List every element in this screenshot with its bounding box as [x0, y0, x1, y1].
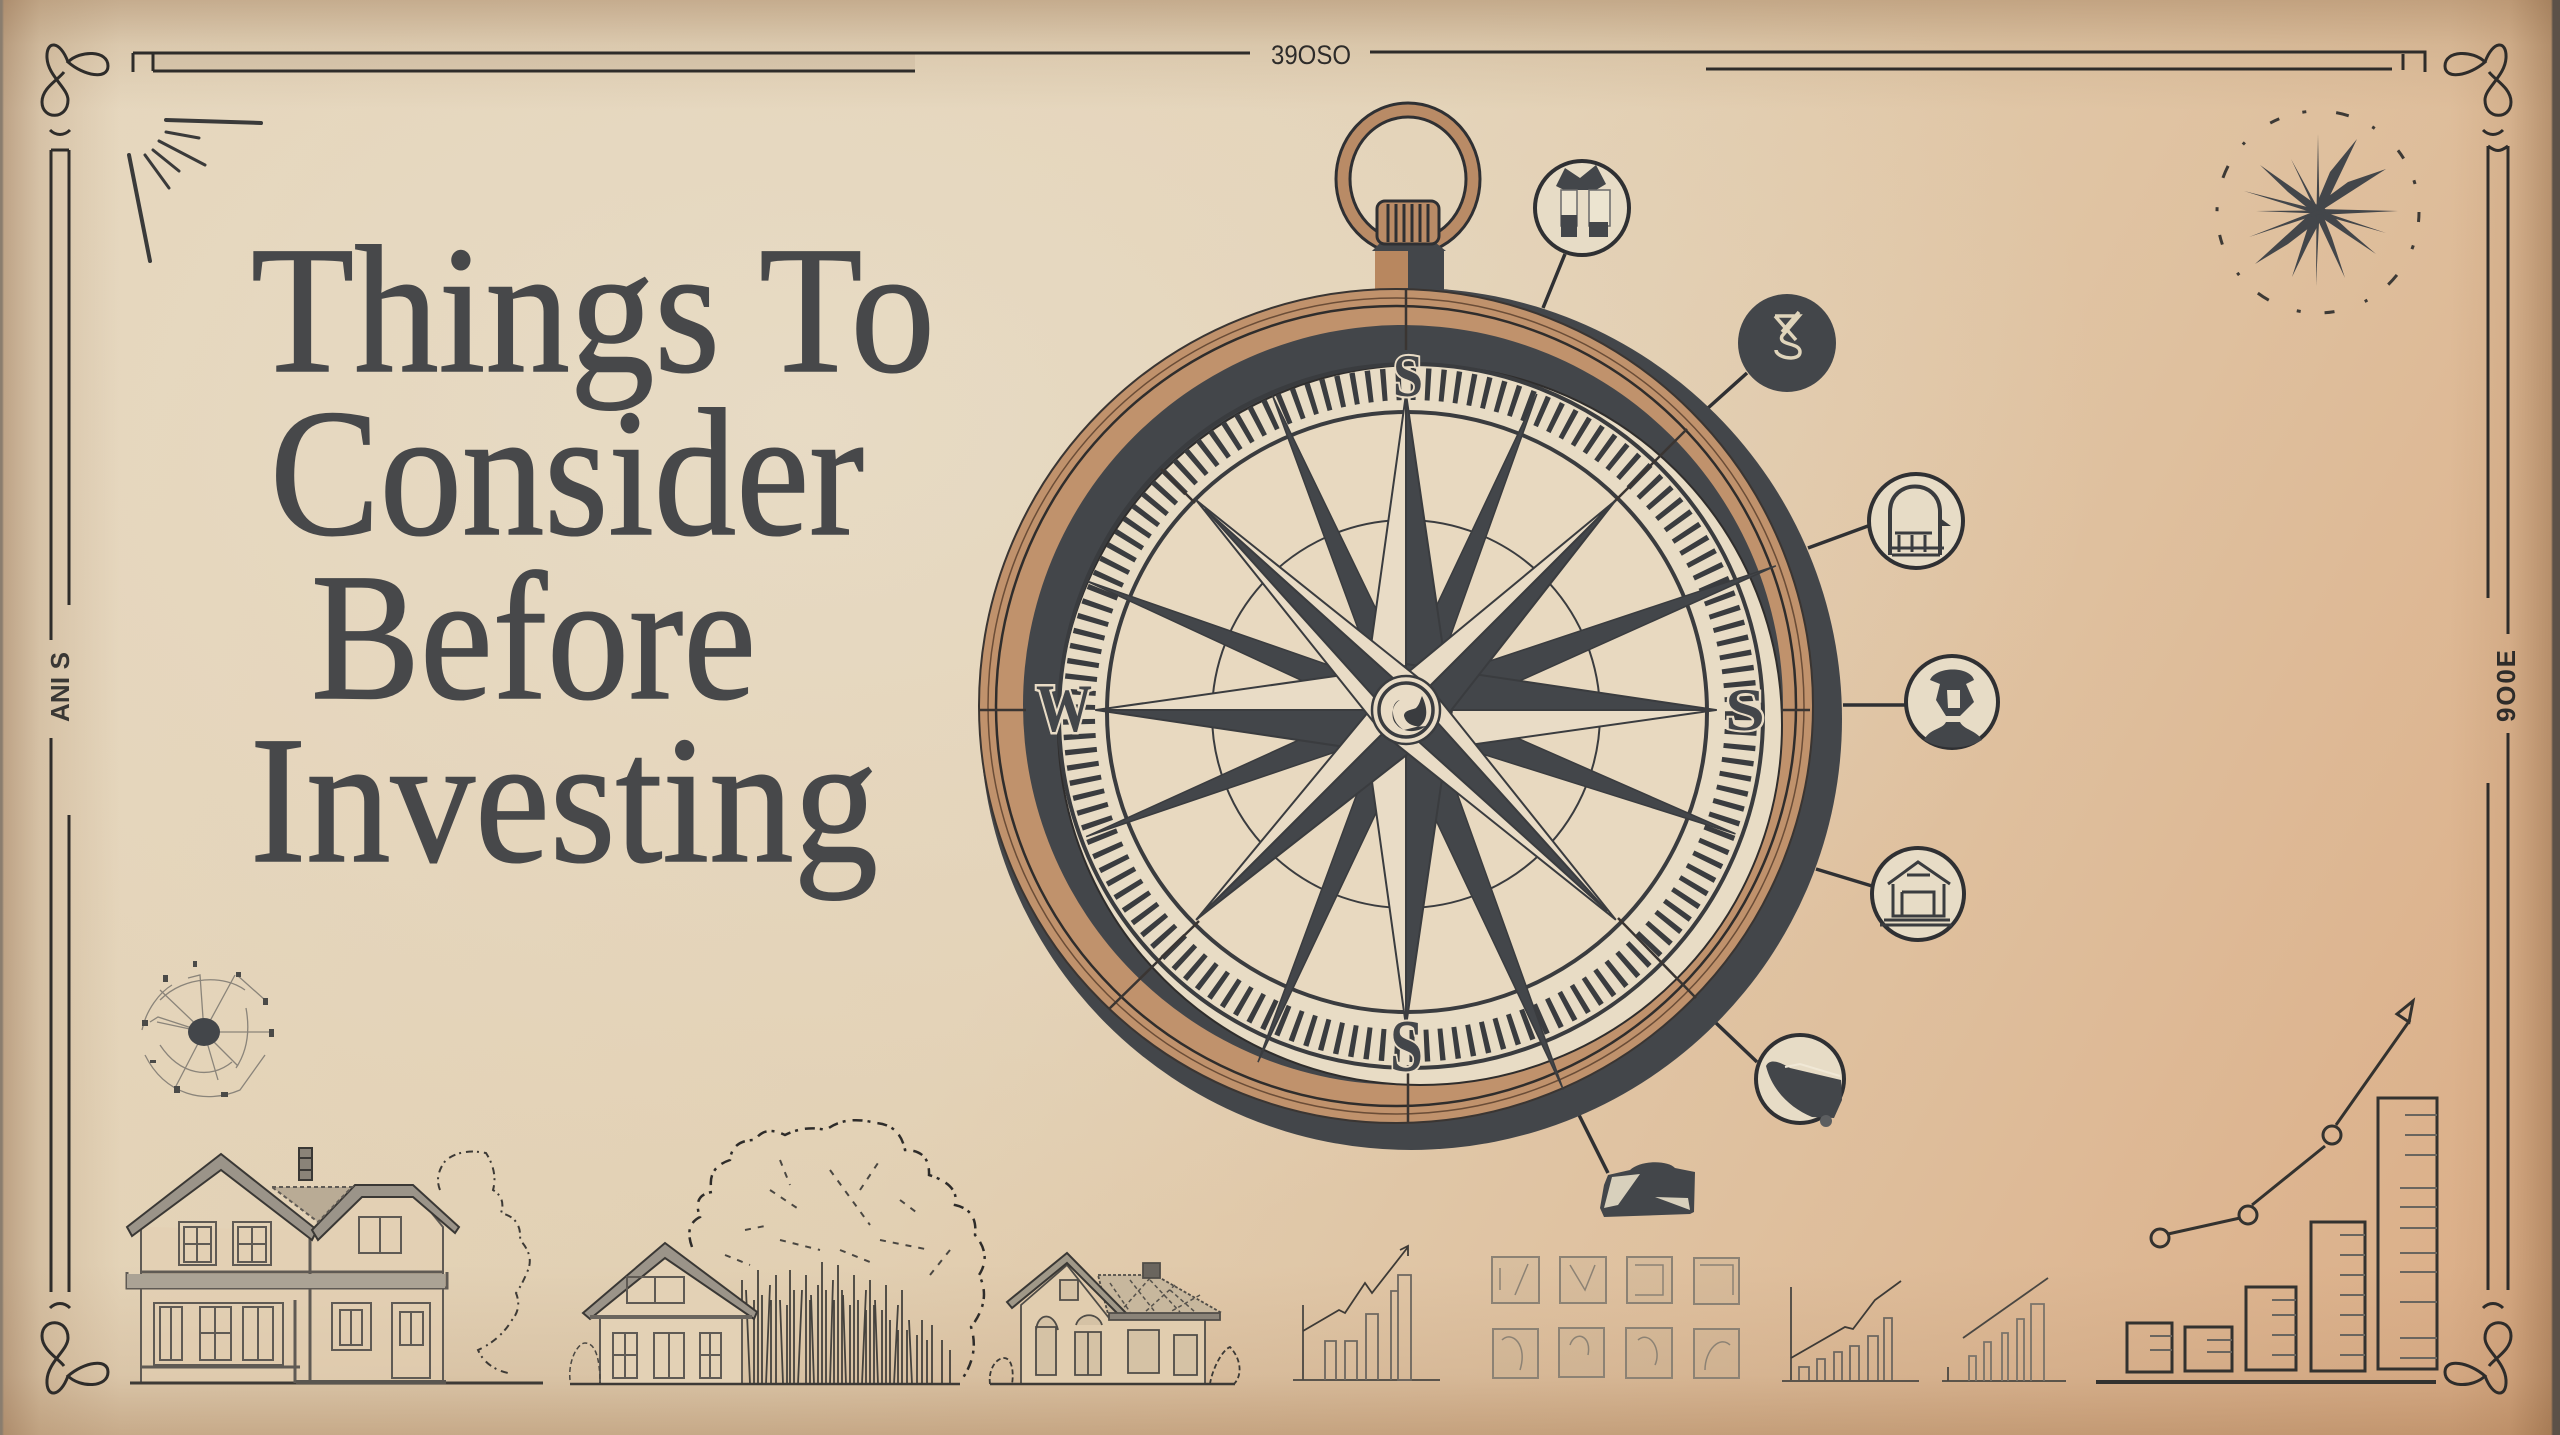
frame caption: right: 9O0E — [2491, 650, 2521, 722]
compass dial — [1058, 365, 1782, 1085]
corner knot: bottom left — [42, 1304, 108, 1393]
sun rays: top left — [129, 120, 261, 261]
small bar chart 1 — [1293, 1246, 1440, 1380]
callout connector lines — [1543, 254, 1905, 1173]
compass letters: S — [1393, 343, 1423, 409]
bar tick marks — [2150, 1115, 2437, 1358]
compass letters: W — [1036, 670, 1092, 746]
frame caption: left: ANI S — [45, 652, 75, 722]
title: Consider — [270, 373, 864, 574]
diagonal points — [1173, 477, 1641, 945]
degree ticks — [1079, 384, 1741, 1046]
compass case — [980, 288, 1842, 1150]
small bar chart 2 — [1782, 1281, 1919, 1381]
secondary points — [1080, 388, 1783, 1097]
corner knot: bottom right — [2445, 1304, 2511, 1393]
house 1 — [127, 1148, 543, 1384]
compass rose — [979, 290, 1810, 1123]
compass letters: S — [1390, 1006, 1423, 1088]
compass letters: S — [1725, 677, 1765, 743]
tree trunks — [742, 1262, 950, 1384]
cardinal points — [1096, 394, 1716, 1026]
callout icon 3: arch doorway — [1869, 474, 1963, 568]
large growth chart — [2096, 1001, 2437, 1382]
callout icon 4: portrait — [1906, 656, 1998, 748]
callout icon 1: houses — [1535, 161, 1629, 255]
tree behind house 1 — [438, 1152, 530, 1373]
radial lines across bezel — [979, 290, 1810, 1123]
house 2 with big tree — [570, 1120, 985, 1384]
compass — [979, 110, 1842, 1150]
callout icon 5: barn — [1872, 848, 1964, 940]
small bar chart 3 — [1942, 1278, 2066, 1381]
icon tile grid — [1492, 1257, 1739, 1378]
title — [250, 210, 935, 901]
compass hub — [1372, 676, 1440, 744]
corner knot: top right — [2445, 45, 2511, 135]
compass ring handle — [1343, 110, 1473, 292]
compass star: top right — [2217, 111, 2419, 313]
compass letters — [1036, 343, 1765, 1088]
corner knot: top left — [42, 45, 108, 135]
title: Things To — [251, 210, 935, 411]
title: Before — [311, 537, 756, 738]
frame caption: top: 39OSO — [1271, 40, 1351, 70]
callout icon 6: boat — [1756, 1035, 1844, 1127]
compass star: bottom left — [142, 961, 274, 1097]
callout icon 7: briefcase — [1600, 1162, 1695, 1217]
callout icon 2: dark medallion — [1738, 294, 1836, 392]
growth arrow line — [2168, 1020, 2410, 1234]
house 3 — [990, 1253, 1240, 1384]
big tree outline — [689, 1120, 985, 1382]
title: Investing — [250, 700, 878, 901]
